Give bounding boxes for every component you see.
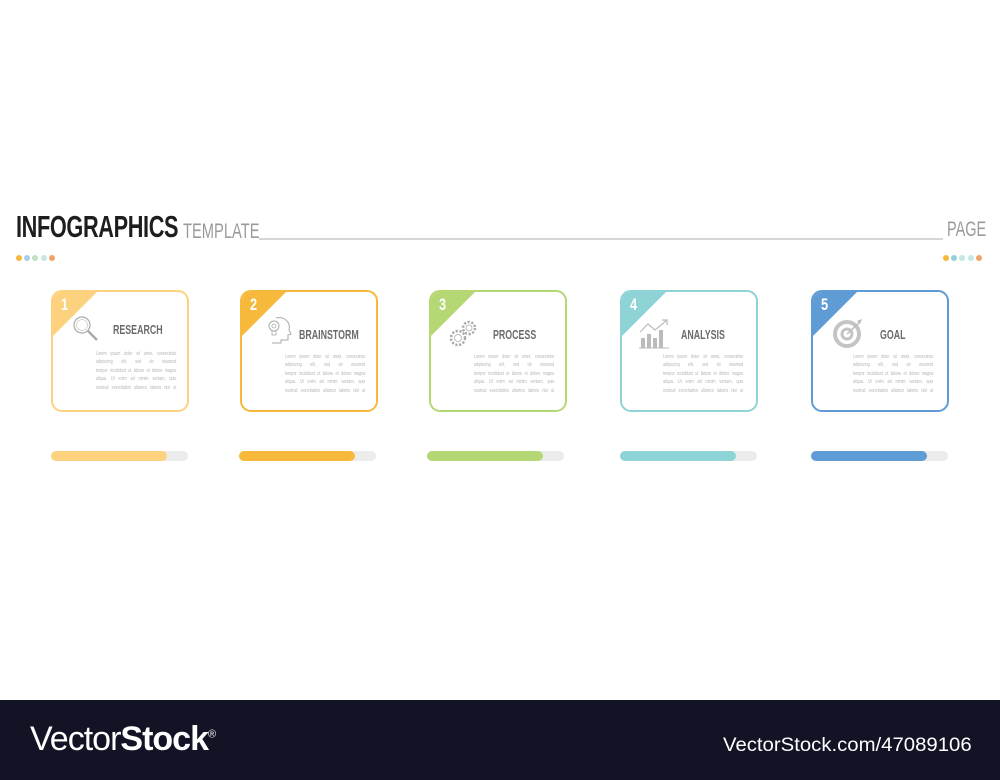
footer logo: VectorStock® [30, 720, 215, 758]
text block: nostrud exercitation ullamco laboris nisi ut [96, 385, 176, 391]
text block: nostrud exercitation ullamco laboris nisi ut [474, 388, 554, 394]
text block [285, 354, 366, 394]
panel: research [51, 290, 189, 412]
panel: analysis [620, 290, 758, 412]
text block: adipiscing elit, sed do eiusmod [853, 362, 933, 368]
number 5: 5 [821, 295, 828, 314]
text block: nostrud exercitation ullamco laboris nisi ut [853, 388, 933, 394]
text block: tempor incididunt ut labore et dolore magna [663, 371, 743, 377]
text block: aliqua. Ut enim ad minim veniam, quis [474, 379, 554, 385]
text block: Lorem ipsum dolor sit amet, consectetur [474, 354, 554, 360]
text block: adipiscing elit, sed do eiusmod [474, 362, 554, 368]
heading: RESEARCH [113, 322, 163, 337]
text block: nostrud exercitation ullamco laboris nisi ut [285, 388, 365, 394]
number 1: 1 [61, 295, 68, 314]
text block: tempor incididunt ut labore et dolore magna [474, 371, 554, 377]
text block: aliqua. Ut enim ad minim veniam, quis [853, 379, 933, 385]
text block: tempor incididunt ut labore et dolore magna [96, 368, 176, 374]
icon: magnifier [73, 316, 98, 341]
progress bar 5 [811, 451, 948, 461]
heading: GOAL [880, 327, 906, 342]
progress bar 2 [239, 451, 376, 461]
footer [0, 700, 1000, 780]
subtitle: TEMPLATE [183, 220, 260, 243]
number 3: 3 [439, 295, 446, 314]
text block: adipiscing elit, sed do eiusmod [663, 362, 743, 368]
text block: aliqua. Ut enim ad minim veniam, quis [285, 379, 365, 385]
text block [853, 354, 934, 394]
heading: BRAINSTORM [299, 327, 359, 342]
text block: aliqua. Ut enim ad minim veniam, quis [96, 376, 176, 382]
icon: target [833, 319, 862, 348]
footer url: VectorStock.com/47089106 [723, 735, 972, 756]
text block [96, 351, 176, 391]
progress bar 3 [427, 451, 564, 461]
icon: gears [450, 320, 476, 346]
page label: PAGE [947, 218, 986, 241]
text block: Lorem ipsum dolor sit amet, consectetur [663, 354, 743, 360]
text block: Lorem ipsum dolor sit amet, consectetur [853, 354, 933, 360]
text block: Lorem ipsum dolor sit amet, consectetur [96, 351, 176, 357]
progress bar 4 [620, 451, 757, 461]
header line [259, 238, 943, 240]
heading: PROCESS [493, 327, 536, 342]
text block: tempor incididunt ut labore et dolore magna [853, 371, 933, 377]
text block [663, 354, 744, 394]
text block: adipiscing elit, sed do eiusmod [285, 362, 365, 368]
text block: adipiscing elit, sed do eiusmod [96, 359, 176, 365]
progress bar 1 [51, 451, 188, 461]
dots right [943, 255, 982, 261]
number 2: 2 [250, 295, 257, 314]
heading: ANALYSIS [681, 327, 725, 342]
number 4: 4 [630, 295, 637, 314]
text block: nostrud exercitation ullamco laboris nisi ut [663, 388, 743, 394]
text block: tempor incididunt ut labore et dolore magna [285, 371, 365, 377]
icon: head bulb [268, 317, 292, 344]
text block [474, 354, 554, 394]
panel: goal [811, 290, 949, 412]
text block: aliqua. Ut enim ad minim veniam, quis [663, 379, 743, 385]
title: INFOGRAPHICS [16, 209, 178, 244]
panel: process [429, 290, 567, 412]
icon: chart [639, 319, 669, 348]
dots left [16, 255, 55, 261]
text block: Lorem ipsum dolor sit amet, consectetur [285, 354, 365, 360]
panel: brainstorm [240, 290, 378, 412]
